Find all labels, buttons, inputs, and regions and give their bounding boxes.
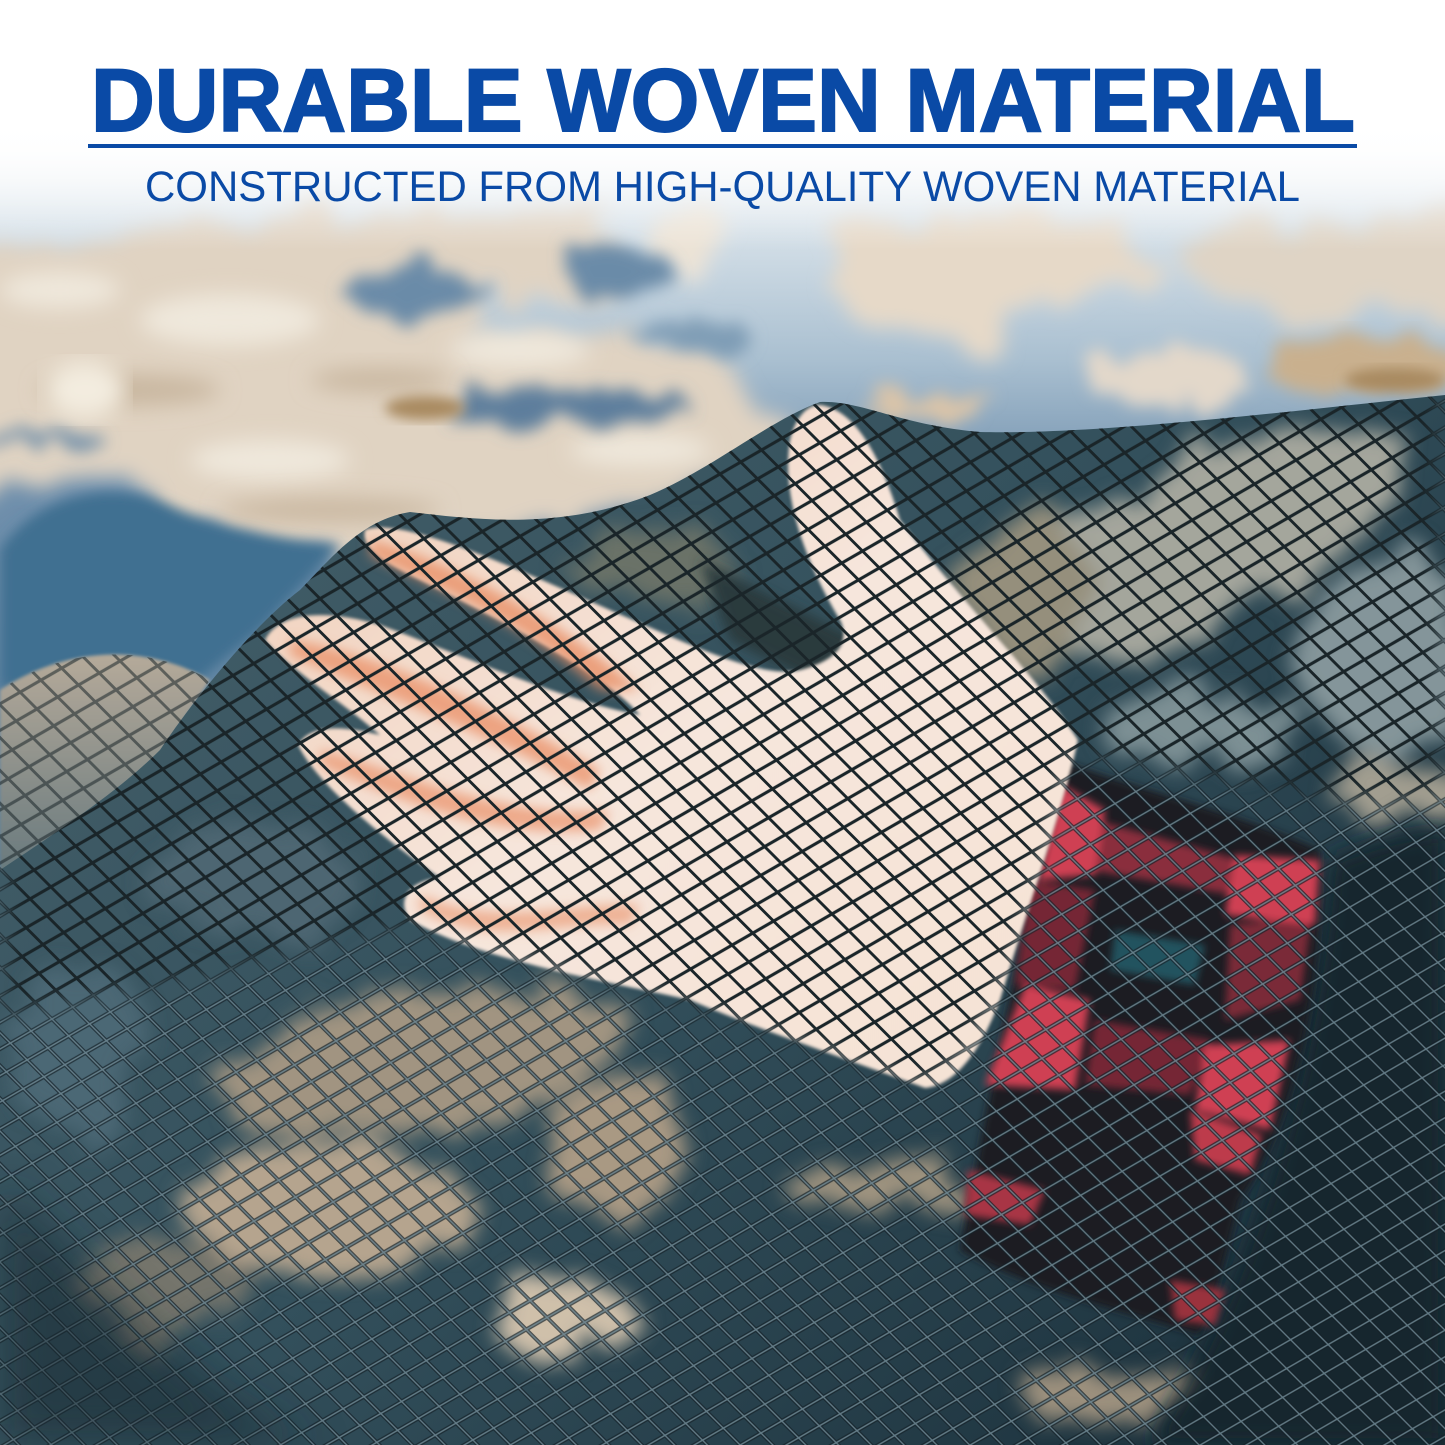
hand — [265, 405, 1078, 1088]
sand clumps — [0, 210, 1445, 560]
woven net draped over hand — [0, 395, 1445, 1445]
shaded mottling on the sand — [40, 368, 450, 522]
title: DURABLE WOVEN MATERIAL — [91, 50, 1355, 150]
dark mesh over upper net and hand — [0, 396, 1445, 1088]
objects beneath net: sand and rocks — [20, 375, 1445, 1423]
heading block — [88, 50, 1357, 211]
dark shadow right — [1150, 830, 1445, 1445]
muted red stripes — [1090, 820, 1240, 895]
title underline — [88, 144, 1357, 148]
dark gap behind thumb — [696, 556, 844, 671]
sand patches, right — [870, 337, 1445, 417]
teal centre — [1110, 930, 1205, 985]
lower left water — [0, 492, 340, 690]
blue patches — [0, 244, 750, 448]
pale mottling on the sand — [0, 272, 710, 480]
left far netting — [0, 640, 210, 880]
plaid sleeve — [960, 760, 1320, 1335]
bottom darkening — [0, 1180, 320, 1445]
brown specks — [385, 368, 1445, 420]
subtitle: CONSTRUCTED FROM HIGH-QUALITY WOVEN MATERIAL — [145, 163, 1300, 211]
bright red checks — [1038, 785, 1105, 880]
top white fade — [0, 0, 1445, 250]
threaded mesh over dark lower areas — [0, 397, 1445, 1445]
